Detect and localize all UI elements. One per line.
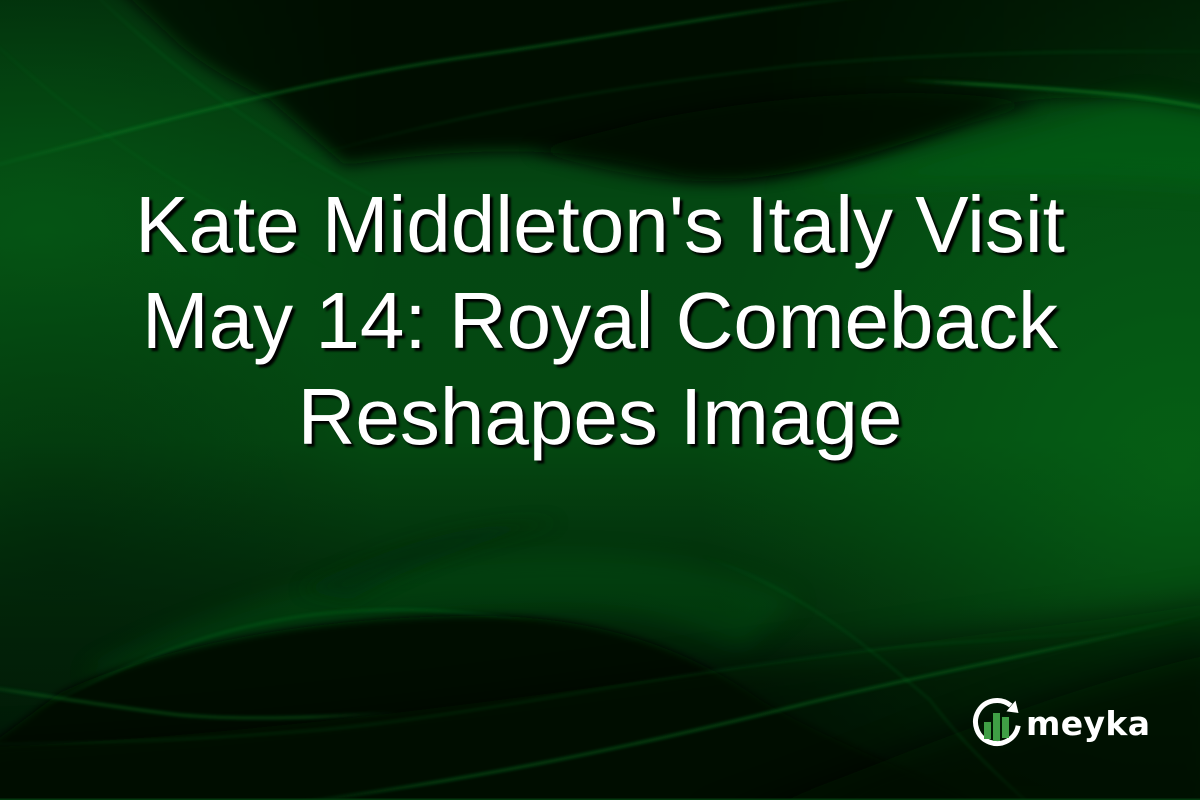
title <box>135 180 1068 465</box>
icon: circular arrow with bars <box>976 701 1018 744</box>
wordmark: meyka <box>1026 704 1150 743</box>
logo: meyka <box>972 698 1150 746</box>
title: May 14: Royal Comeback <box>142 276 1058 365</box>
title: Kate Middleton's Italy Visit <box>135 180 1065 269</box>
title: Reshapes Image <box>298 372 902 461</box>
